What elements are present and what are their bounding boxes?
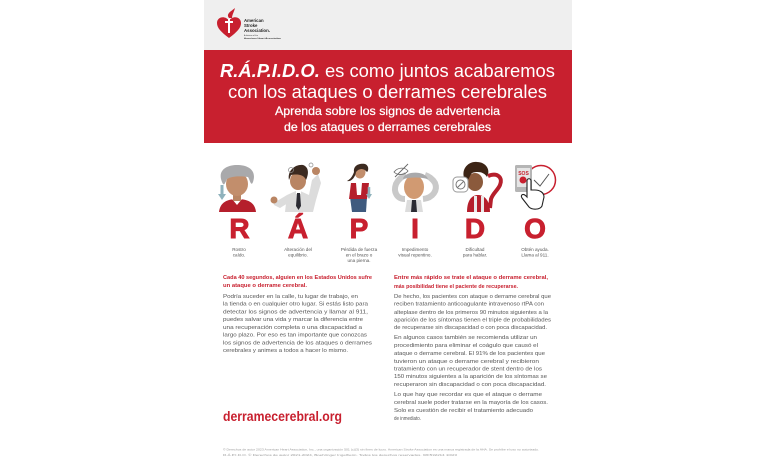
- right column paragraph 2: ataque o derrame cerebral. El 91% de los pacientes que: [394, 351, 545, 357]
- right column paragraph 3: de inmediato.: [394, 416, 421, 422]
- sign captions: Impedimento: [402, 247, 429, 252]
- letters R A P I D O: [229, 213, 546, 244]
- left column paragraph: detectar los signos de advertencia y llamar al 911,: [223, 310, 369, 316]
- left column paragraph: los signos de advertencia de los ataques o derrames: [223, 340, 372, 346]
- subtitle: de los ataques o derrames cerebrales: [284, 120, 491, 134]
- right column paragraph 1: de recuperarse sin discapacidad o con poca discapacidad.: [394, 325, 547, 331]
- subtitle: [275, 104, 500, 134]
- footer legal text: [223, 448, 539, 457]
- red title banner: [204, 50, 572, 143]
- left column paragraph: largo plazo. Por eso es tan importante que conozcas: [223, 332, 367, 338]
- right column paragraph 1: De hecho, los pacientes con ataque o derrame cerebral que: [394, 294, 551, 300]
- left column heading: un ataque o derrame cerebral.: [223, 283, 307, 289]
- website link: derramecerebral.org: [223, 409, 342, 424]
- right column paragraph 2: 150 minutos siguientes a la aparición de los síntomas se: [394, 374, 547, 380]
- sign captions: Llama al 911.: [521, 252, 549, 258]
- left column paragraph: puedes salvar una vida y marcar la diferencia entre: [223, 317, 363, 323]
- logo wordmark: [244, 18, 282, 40]
- left column paragraph: cerebrales y animes a todos a hacer lo mismo.: [223, 348, 348, 354]
- right column heading: [394, 275, 548, 290]
- left column paragraph: una recuperación completa o una discapacidad a: [223, 325, 363, 331]
- letters R A P I D O: P: [350, 213, 368, 244]
- title: R.Á.P.I.D.O. es como juntos acabaremos: [220, 60, 555, 81]
- sign captions: Dificultad: [466, 247, 485, 252]
- letters R A P I D O: D: [465, 213, 485, 244]
- header band with logo: [204, 0, 572, 50]
- title: [220, 60, 555, 102]
- sign captions: en el brazo o: [346, 252, 373, 258]
- letters R A P I D O: Á: [288, 213, 308, 244]
- icon: O, call 911: SOS: [518, 171, 529, 177]
- subtitle: Aprenda sobre los signos de advertencia: [275, 104, 500, 118]
- footer legal text: © Derechos de autor 2023 American Heart Association, Inc., una organización 501 (c)(3) sin fines de lucro. American Stroke Association es una marca registrada de la AHA. Se prohíbe el uso no autorizado.: [223, 448, 539, 452]
- right column paragraph 2: [394, 335, 547, 388]
- right column paragraph 1: alteplase dentro de los primeros 90 minutos siguientes a la: [394, 310, 549, 316]
- left column paragraph: la tienda o en cualquier otro lugar. Si estás listo para: [223, 302, 369, 308]
- sign captions: visual repentino.: [398, 252, 432, 258]
- logo wordmark: Association.: [244, 28, 270, 33]
- sign captions: para hablar.: [463, 252, 487, 258]
- footer legal text: R.Á.P.I.D.O. © Derechos de autor 2021-2024, Boehringer Ingelheim. Todos los derechos reservados. WF532214 10/23: [223, 453, 457, 457]
- icon: D, difficulty speaking: [453, 162, 501, 212]
- sign captions: equilibrio.: [288, 252, 308, 258]
- logo wordmark: Stroke: [244, 23, 258, 28]
- sign captions: una pierna.: [348, 258, 370, 263]
- right column paragraph 1: aparición de los síntomas tienen el triple de probabilidades: [394, 318, 551, 324]
- sign captions: Rostro: [232, 247, 246, 252]
- icon: O, call 911: [515, 165, 556, 209]
- logo heart and torch: [217, 8, 241, 38]
- sign captions: Alteración del: [284, 247, 312, 252]
- letters R A P I D O: R: [229, 213, 250, 244]
- right column paragraph 3: cerebral suele poder tratarse en la mayoría de los casos.: [394, 400, 548, 406]
- right column paragraph 2: tratamiento con un recuperador de stent dentro de los: [394, 366, 542, 372]
- right column paragraph 3: [394, 392, 548, 422]
- sign captions: [232, 247, 549, 263]
- right column paragraph 1: reciben tratamiento anticoagulante intravenoso rtPA con: [394, 302, 544, 308]
- left column paragraph: Podría suceder en la calle, tu lugar de trabajo, en: [223, 294, 358, 300]
- right column paragraph 3: Lo que hay que recordar es que el ataque o derrame: [394, 392, 542, 398]
- icon: R, drooping face: [218, 165, 256, 212]
- sign captions: caído.: [233, 252, 245, 258]
- right column heading: más posibilidad tiene el paciente de recuperarse.: [394, 284, 518, 290]
- right column paragraph 2: procedimiento para eliminar el coágulo que causó el: [394, 343, 538, 349]
- sign captions: Obtén ayuda.: [521, 247, 549, 252]
- left column paragraph: [223, 294, 372, 354]
- left column heading: [223, 275, 372, 289]
- icon: A, balance problem: [270, 163, 321, 212]
- icon: I, sudden vision loss: [394, 164, 436, 212]
- right column paragraph 2: En algunos casos también se recomienda utilizar un: [394, 335, 537, 341]
- right column heading: Entre más rápido se trate el ataque o derrame cerebral,: [394, 275, 548, 281]
- logo wordmark: American Heart Association: [244, 37, 282, 40]
- right column paragraph 2: recuperaron sin discapacidad o con poca discapacidad.: [394, 382, 546, 388]
- sign captions: Pérdida de fuerza: [341, 247, 378, 252]
- letters R A P I D O: I: [411, 213, 419, 244]
- right column paragraph 3: Solo es cuestión de recibir el tratamiento adecuado: [394, 408, 533, 414]
- title: con los ataques o derrames cerebrales: [228, 81, 547, 102]
- logo wordmark: American: [244, 18, 264, 23]
- right column paragraph 1: [394, 294, 551, 331]
- logo wordmark: A division of the: [244, 34, 259, 37]
- left column heading: Cada 40 segundos, alguien en los Estados Unidos sufre: [223, 275, 372, 281]
- icon: P, limb weakness: [347, 164, 372, 212]
- right column paragraph 2: tuvieron un ataque o derrame cerebral y recibieron: [394, 359, 539, 365]
- letters R A P I D O: O: [524, 213, 546, 244]
